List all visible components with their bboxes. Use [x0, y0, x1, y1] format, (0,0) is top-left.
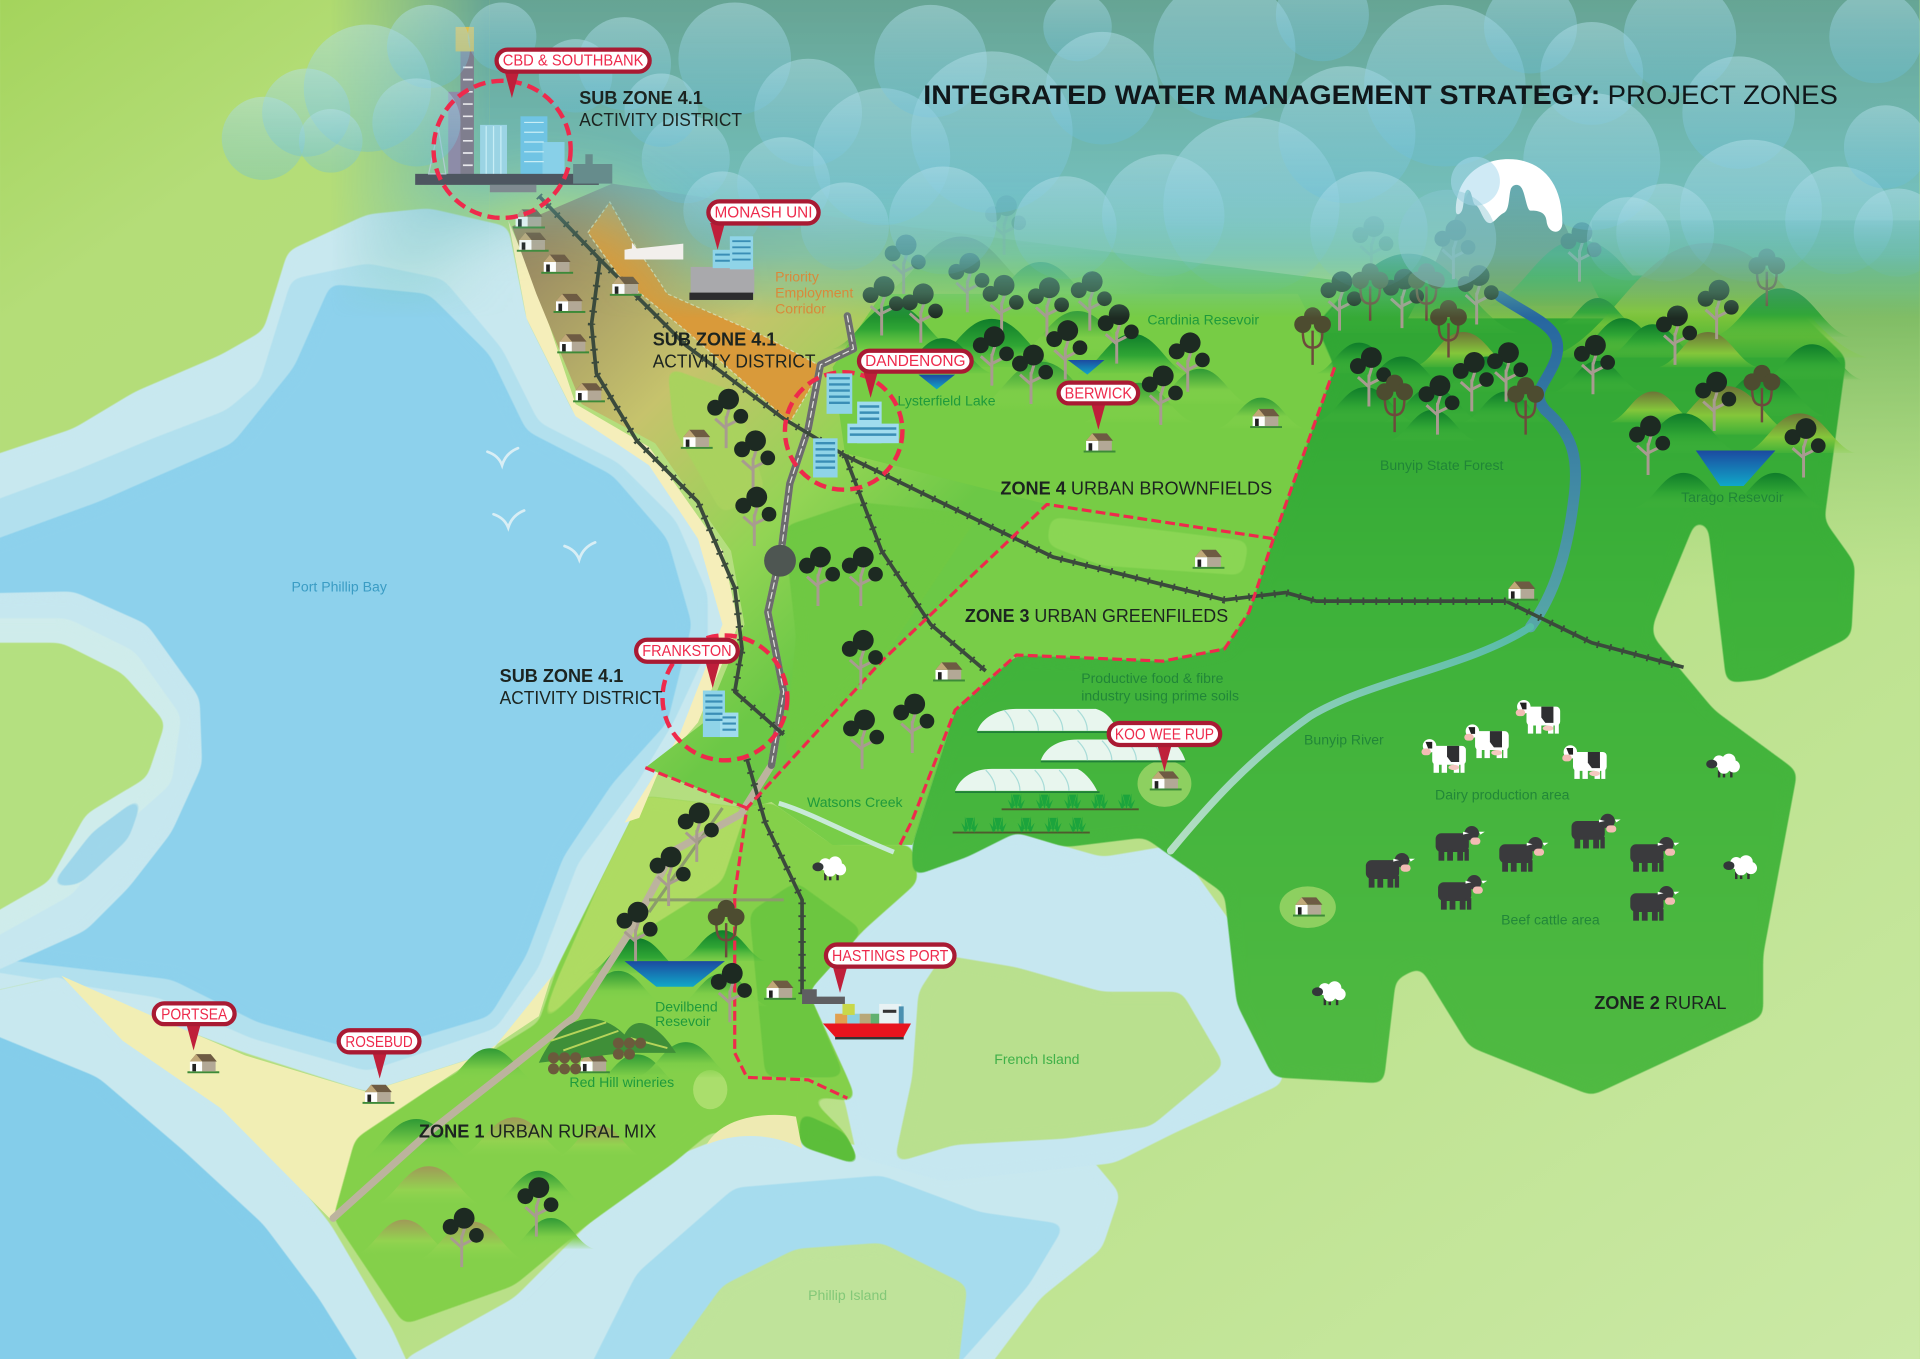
Red Hill wineries	[539, 1019, 676, 1074]
label: Devilbend Resevoir: Resevoir	[655, 1013, 711, 1029]
label: sub zone corridor: ACTIVITY DISTRICT	[653, 350, 816, 371]
darker land band right of forest	[1592, 220, 1920, 588]
label: Devilbend Resevoir	[655, 998, 718, 1029]
hills: peninsula	[355, 930, 765, 1261]
callout: Monash Uni: MONASH UNI	[715, 204, 812, 221]
callout: Berwick	[1059, 383, 1138, 430]
Nepean sand spit	[61, 976, 551, 1219]
callout: Portsea	[154, 1003, 235, 1050]
callout: Dandenong: DANDENONG	[865, 353, 966, 370]
mountain body	[1408, 159, 1610, 318]
label: sub zone CBD: SUB ZONE 4.1	[579, 87, 703, 108]
icons: Dandenong towers	[813, 373, 899, 477]
label: Phillip Island: Phillip Island	[808, 1287, 887, 1303]
icons: Frankston towers	[703, 691, 738, 737]
label: sub zone Frankston: SUB ZONE 4.1	[500, 665, 623, 686]
houses	[187, 209, 1538, 1104]
water: Port Phillip Bay	[0, 208, 735, 1092]
zone 2 and forest land	[912, 275, 1855, 1096]
label: Dairy production area: Dairy production area	[1435, 786, 1570, 802]
label: sub zone CBD: ACTIVITY DISTRICT	[579, 109, 742, 130]
label: Bunyip State Forest: Bunyip State Forest	[1380, 457, 1504, 473]
hills: Bunyip forest	[1298, 240, 1867, 453]
label: Productive food	[1081, 670, 1239, 703]
label: Beef cattle area: Beef cattle area	[1501, 911, 1600, 927]
label: Cardinia Resevoir: Cardinia Resevoir	[1147, 311, 1259, 327]
zone 4 land	[833, 294, 1335, 539]
title: PROJECT ZONES	[1608, 80, 1838, 110]
label: Priority Employment Corridor	[775, 269, 853, 316]
beef cattle	[1366, 814, 1679, 921]
callout: Rosebud	[339, 1030, 419, 1079]
callout: CBD & Southbank: CBD & SOUTHBANK	[503, 53, 644, 70]
label: zone 3: ZONE 3 URBAN GREENFILEDS	[965, 605, 1228, 626]
label: sub zone corridor	[653, 328, 816, 371]
reservoirs	[573, 360, 1824, 1006]
callout: Hastings Port: HASTINGS PORT	[832, 948, 948, 965]
label: Red Hill wineries: Red Hill wineries	[569, 1074, 674, 1090]
callout: Frankston: FRANKSTON	[642, 643, 732, 660]
activity district rings	[662, 372, 902, 760]
CBD skyline	[415, 27, 612, 192]
employment corridor	[588, 202, 823, 422]
callout: Rosebud: ROSEBUD	[345, 1034, 413, 1051]
label: Watsons Creek: Watsons Creek	[807, 794, 904, 810]
zone 1 land	[333, 796, 918, 1325]
ship	[823, 1004, 911, 1039]
callout: Berwick: BERWICK	[1065, 386, 1133, 403]
icons: Monash Uni precinct	[625, 236, 754, 300]
label: Port Phillip Bay: Port Phillip Bay	[292, 578, 387, 594]
birds	[487, 448, 595, 560]
zone 3 land	[667, 367, 1273, 845]
label: Productive food: industry using prime soils	[1081, 687, 1239, 703]
callout: Koo Wee Rup	[1109, 723, 1220, 771]
label: Lysterfield Lake: Lysterfield Lake	[898, 392, 996, 408]
label: zone 2: ZONE 2 RURAL	[1594, 992, 1726, 1013]
clouds	[222, 0, 1920, 294]
sheep	[812, 754, 1757, 1005]
label: French Island: French Island	[994, 1051, 1079, 1067]
callout: CBD & Southbank	[497, 50, 650, 98]
water: Western Port and Phillip Island	[404, 833, 1283, 1359]
railway lines	[539, 196, 1684, 994]
label: sub zone CBD	[579, 87, 742, 130]
CBD ring	[434, 81, 571, 218]
callout: Frankston	[636, 640, 738, 688]
label: Priority Employment Corridor: Priority	[775, 269, 819, 285]
label: sub zone Frankston: ACTIVITY DISTRICT	[500, 687, 662, 708]
road	[333, 316, 853, 1218]
label: zone 1: ZONE 1 URBAN RURAL MIX	[419, 1120, 656, 1141]
Bellarine peninsula land	[0, 591, 202, 986]
callout: Monash Uni	[708, 201, 819, 250]
greenhouses	[955, 709, 1185, 792]
trees: round crown	[443, 195, 1826, 1267]
callout: Koo Wee Rup: KOO WEE RUP	[1115, 726, 1214, 743]
river: Bunyip River	[1171, 296, 1576, 851]
label: Bunyip River: Bunyip River	[1304, 731, 1384, 747]
trees: gum	[708, 249, 1785, 957]
crops	[953, 793, 1139, 833]
haze band	[221, 0, 1920, 318]
sandy east bay coast	[508, 220, 738, 823]
dairy cows	[1421, 700, 1607, 779]
snow cap	[1398, 157, 1562, 288]
label: sub zone corridor: SUB ZONE 4.1	[653, 328, 776, 349]
label: Devilbend Resevoir: Devilbend	[655, 998, 718, 1014]
hills: Cardinia forest	[833, 237, 1304, 429]
zone boundaries	[645, 367, 1335, 1098]
label: zone 4: ZONE 4 URBAN BROWNFIELDS	[1000, 478, 1272, 499]
label: Priority Employment Corridor: Corridor	[775, 300, 826, 316]
label: Tarago Resevoir: Tarago Resevoir	[1681, 489, 1784, 505]
title: INTEGRATED WATER MANAGEMENT STRATEGY:	[923, 80, 1600, 110]
jetty	[802, 967, 845, 1004]
water: Bass Strait	[0, 976, 423, 1359]
callout: Dandenong	[859, 351, 972, 398]
callout: Portsea: PORTSEA	[161, 1006, 228, 1023]
label: Productive food: Productive food & fibre	[1081, 670, 1224, 686]
callout: Hastings Port	[826, 945, 954, 993]
label: sub zone Frankston	[500, 665, 662, 708]
label: Priority Employment Corridor: Employment	[775, 285, 853, 301]
creek: Watsons Creek	[779, 803, 894, 852]
north land: activity district	[512, 184, 1347, 845]
